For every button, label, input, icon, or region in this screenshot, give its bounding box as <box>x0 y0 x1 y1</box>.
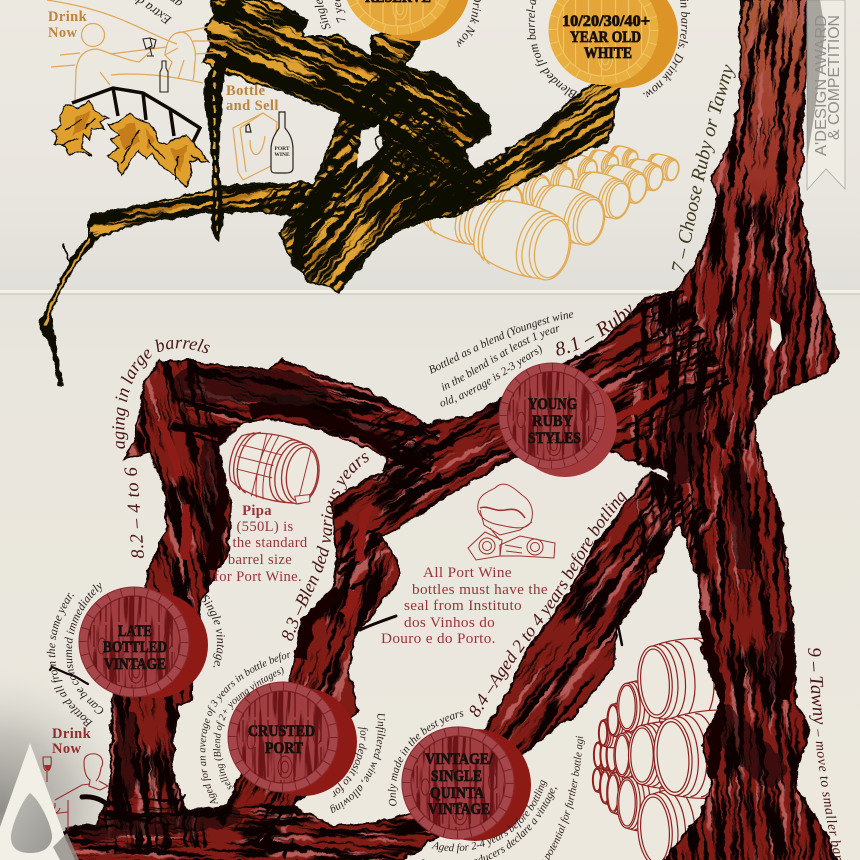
text: bottle and sell: and Sell <box>226 98 279 114</box>
disc: crusted port: CRUSTED <box>248 723 315 740</box>
background: top panel <box>0 0 860 291</box>
text: seal caption: bottles must have the <box>412 581 548 598</box>
heading: 8.3: 8.3 –Blen ded various years <box>282 452 369 641</box>
award banner: & COMPETITION <box>826 15 843 140</box>
award banner: A'DESIGN AWARD <box>813 15 830 156</box>
heading: 7 choose ruby or tawny: 7 – Choose Ruby or Tawny <box>672 64 736 273</box>
text: bottle and sell <box>226 83 279 114</box>
disc: vintage single quinta vintage <box>402 727 531 841</box>
disc: 10/20/30/40+ year old white: 10/20/30/40+ <box>562 13 650 30</box>
heading: 8.2: 8.2 – 4 to 6 <box>124 468 144 558</box>
text: pipa caption: Pipa <box>242 503 272 519</box>
text: LBV note: Single vintage. <box>200 595 225 668</box>
text: ruby note: old, average is 2-3 years) <box>440 346 542 406</box>
disc: young ruby styles: YOUNG <box>528 396 577 413</box>
text: vintage note <box>388 711 585 860</box>
gold vine <box>87 0 622 294</box>
heading: 9 tawny: 9 – Tawny – move to smaller barrels <box>808 648 842 860</box>
text: ruby note: Bottled as a blend (Youngest wine <box>428 312 574 374</box>
illustration: drinking couple <box>47 0 227 100</box>
heading: 8.1 ruby: 8.1 – Ruby <box>556 304 632 356</box>
disc: crusted port: PORT <box>265 740 303 757</box>
text: ruby note: in the blend is at least 1 year <box>442 326 560 391</box>
heading: 8.4: 8.4 –Aged 2 to 4 years before botling <box>470 492 628 717</box>
text: pipa caption: barrel size <box>228 552 292 568</box>
text: pipa caption: for Port Wine. <box>214 569 302 585</box>
text: LBV note: Can be consumed immediately <box>64 582 104 714</box>
text: crusted note: for deposit to form <box>333 727 368 798</box>
text: crusted note: Aged for an average of 3 years in bottle before <box>200 652 290 804</box>
disc: vintage single quinta vintage: VINTAGE/ <box>425 751 493 768</box>
text: seal caption <box>381 564 548 647</box>
icon: gift bag and bottle: PORT <box>274 146 290 152</box>
disc: young ruby styles <box>499 363 617 477</box>
text: pipa caption: the standard <box>232 535 308 551</box>
text: drink now gold <box>48 9 88 41</box>
text: vintage note: Only made in the best years <box>388 711 464 806</box>
disc: vintage single quinta vintage: VINTAGE <box>428 801 490 818</box>
disc: 10/20/30/40+ year old white: YEAR OLD <box>570 29 641 46</box>
disc: late bottled vintage: VINTAGE <box>104 656 166 673</box>
illustration: man with glass <box>39 754 108 830</box>
disc: vintage single quinta vintage: QUINTA <box>430 785 484 802</box>
disc: crusted port <box>228 682 357 796</box>
disc: vintage single quinta vintage: SINGLE <box>431 768 482 785</box>
text: ruby note <box>428 312 574 406</box>
hole in right lobe <box>770 318 782 352</box>
text: pipa caption <box>214 503 308 585</box>
award banner <box>807 0 845 190</box>
thorns and tendrils <box>50 616 622 805</box>
text: LBV note: Bottled all from the same year. <box>46 592 93 728</box>
text: crusted note <box>200 652 386 813</box>
disc: late bottled vintage: LATE <box>118 623 152 640</box>
heading: aging in large barrels: aging in large barrels <box>112 338 210 449</box>
text: pipa caption: (550L) is <box>236 519 294 535</box>
text: drink now red <box>52 726 92 757</box>
text: crusted note: selling (Blend of 2+ young vintages) <box>213 666 284 790</box>
background: lower panel <box>0 293 860 860</box>
disc: late bottled vintage <box>79 587 208 698</box>
text: drink now red: Now <box>52 741 82 757</box>
gold barrels <box>418 143 683 288</box>
stacked red barrels <box>592 636 760 860</box>
disc: 10/20/30/40+ year old white <box>548 0 678 88</box>
disc: young ruby styles: STYLES <box>528 430 581 447</box>
disc: reserve <box>343 0 470 41</box>
thin gold branch and tail <box>38 57 385 386</box>
text: seal caption: Douro e do Porto. <box>381 630 496 647</box>
text: drink now gold: Drink <box>48 9 88 25</box>
icon: gift bag and bottle: WINE <box>274 152 290 158</box>
text: vintage note: Aged for 2-4 years before bottling <box>432 780 548 854</box>
icon: port wine seal <box>468 484 555 560</box>
icon: pipa barrel <box>223 425 329 512</box>
text: drink now gold: Now <box>48 25 78 41</box>
text: LBV note <box>46 582 225 728</box>
icon: gift bag and bottle <box>233 112 293 180</box>
text: seal caption: All Port Wine <box>423 564 512 581</box>
text: seal caption: seal from Instituto <box>404 597 522 614</box>
text: bottle and sell: Bottle <box>226 83 266 99</box>
leaves on gold vine <box>52 88 208 188</box>
logo: A-design mark <box>0 743 79 860</box>
disc: 10/20/30/40+ year old white: WHITE <box>584 45 632 62</box>
text: drink now red: Drink <box>52 726 92 742</box>
disc: young ruby styles: RUBY <box>532 413 573 430</box>
disc: late bottled vintage: BOTTLED <box>103 639 167 656</box>
text: crusted note: Unfiltered wine, allowing <box>330 713 386 813</box>
text: seal caption: dos Vinhos do <box>404 614 495 631</box>
